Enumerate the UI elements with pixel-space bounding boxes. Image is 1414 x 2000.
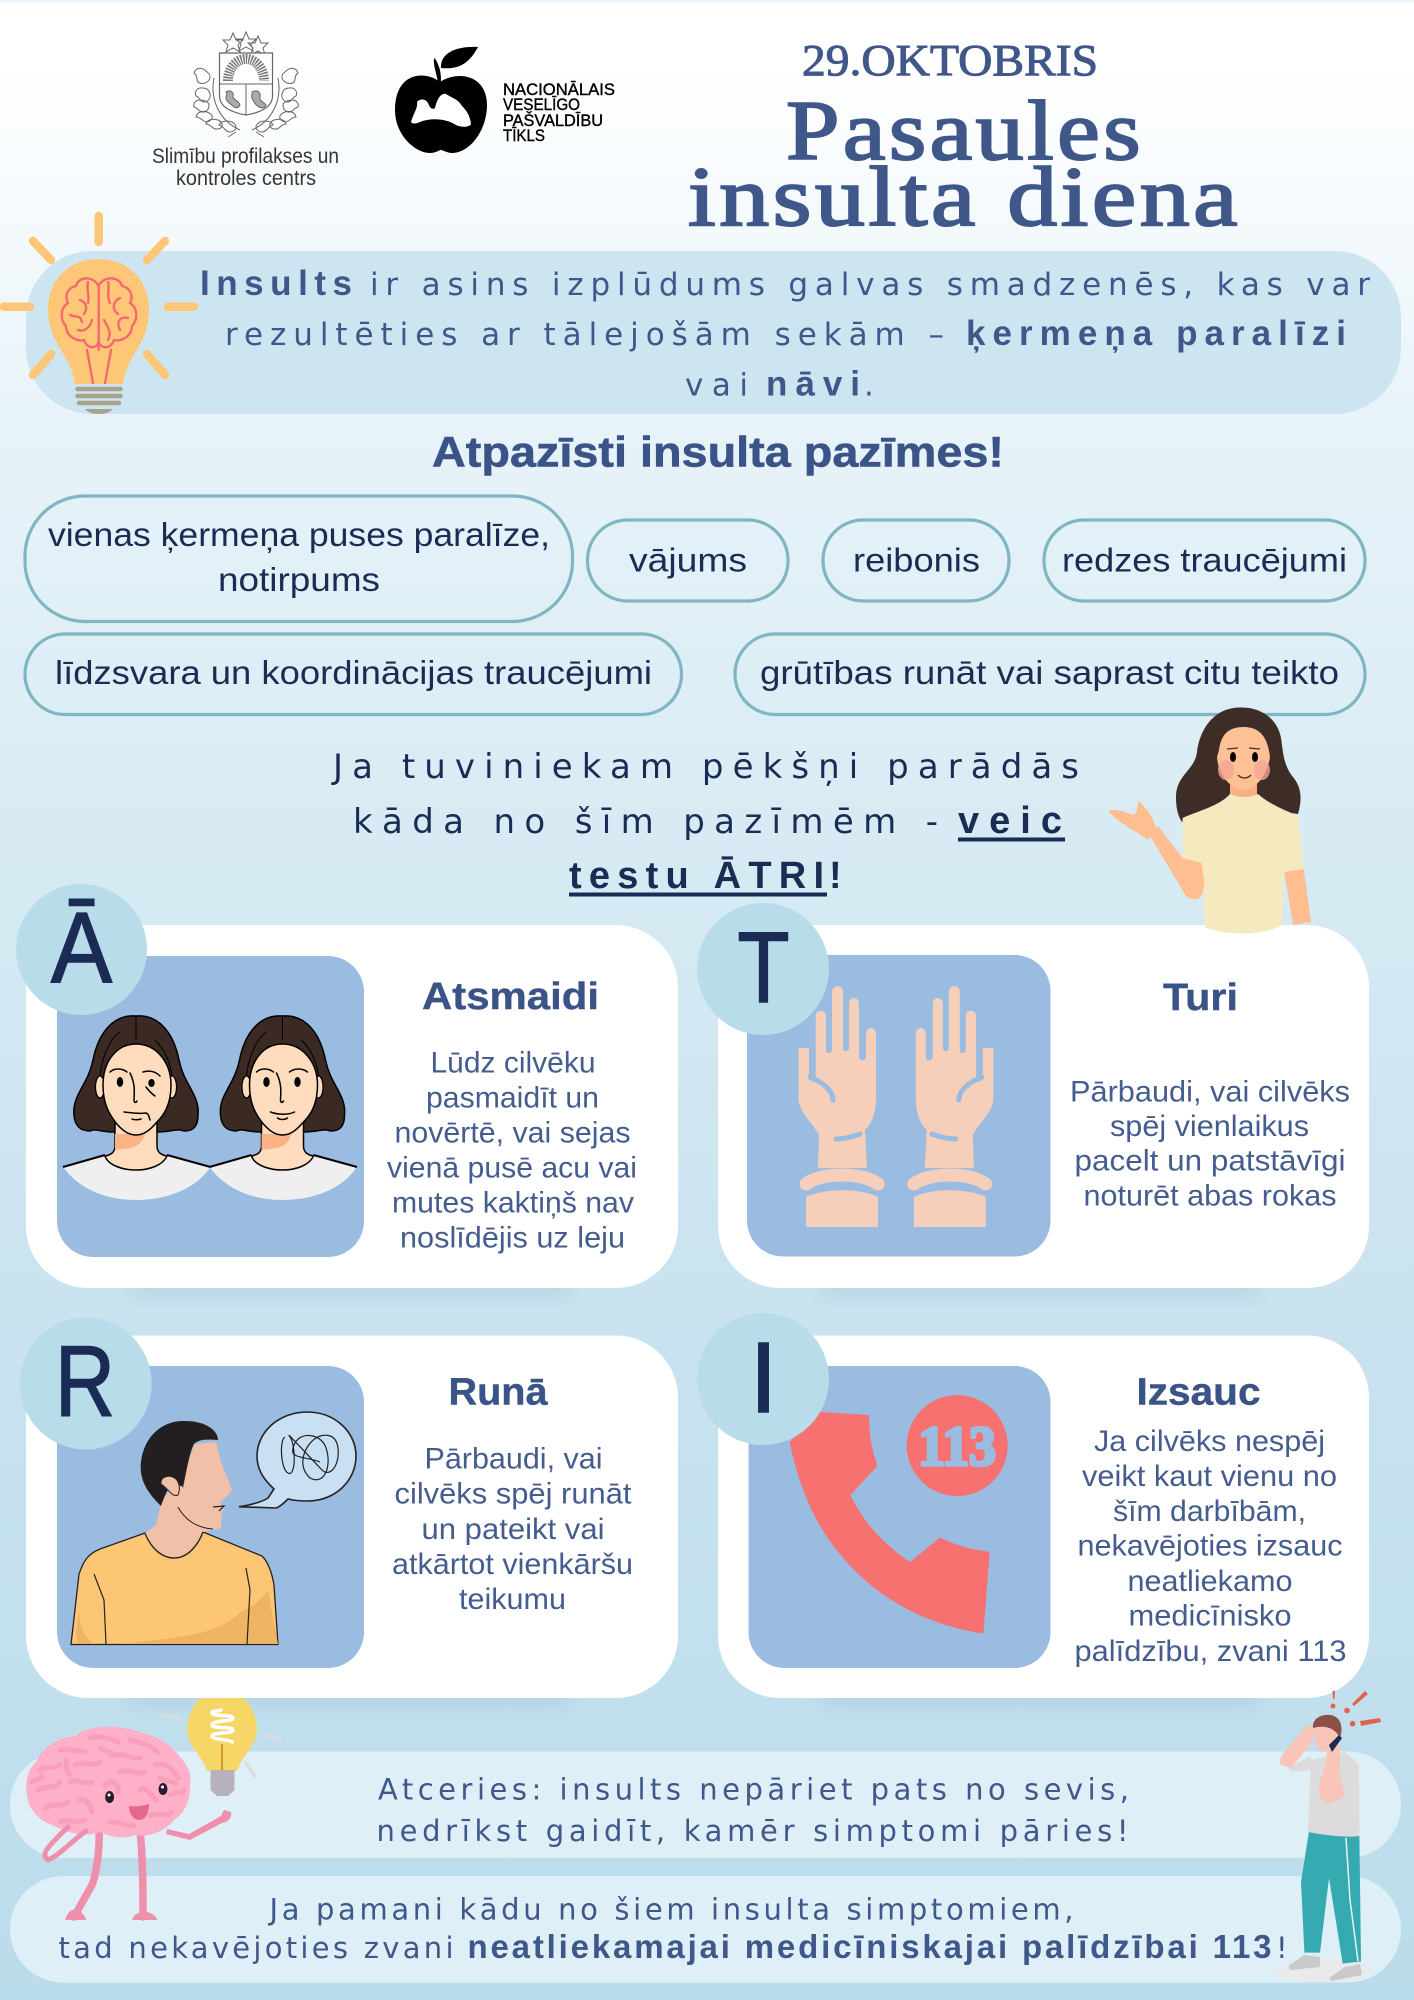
description: palīdzību, zvani 113: [1074, 1635, 1346, 1668]
description: spēj vienlaikus: [1110, 1110, 1309, 1143]
callout text: kāda no šīm pazīmēm -: [353, 802, 938, 842]
definition text: vai: [685, 368, 748, 404]
icon: 113 badge: 113: [918, 1416, 996, 1478]
description: cilvēks spēj runāt: [394, 1478, 632, 1510]
description: Lūdz cilvēku: [430, 1046, 596, 1080]
symptom pill: dizziness: reibonis: [853, 542, 980, 578]
logo text: network: VESELĪGO: [503, 95, 580, 114]
symptom pill: weakness: [588, 520, 788, 601]
definition text: [200, 264, 1370, 404]
letter badge R: [20, 1318, 152, 1450]
callout text: !: [829, 855, 842, 897]
panel: call to action: Ja pamani kādu no šiem insulta simptomiem,: [268, 1892, 1074, 1926]
panel: I call: [697, 1313, 1369, 1698]
icon: light bulb over brain: [163, 1690, 280, 1796]
panel: T hold: [697, 903, 1369, 1288]
description: [1070, 1076, 1350, 1212]
heading Runā: Runā: [448, 1372, 548, 1414]
panel: call to action: !: [1276, 1931, 1288, 1965]
panel: definition: [26, 251, 1401, 414]
description: noslīdējis uz leju: [400, 1222, 625, 1254]
symptom pill: vision: [1044, 520, 1365, 601]
panel: remember: [10, 1752, 1401, 1858]
icon: light bulb with brain: [4, 216, 194, 414]
definition text: nāvi: [766, 364, 860, 404]
description: nekavējoties izsauc: [1078, 1530, 1342, 1562]
definition text: Insults: [200, 264, 352, 303]
symptom pill: paralysis: notirpums: [218, 561, 380, 598]
description: noturēt abas rokas: [1084, 1180, 1336, 1212]
symptom pill: balance: [25, 634, 682, 714]
symptom pill: weakness: vājums: [629, 542, 747, 578]
symptom pill: speech: [735, 634, 1365, 714]
description: un pateikt vai: [422, 1513, 604, 1546]
callout text: [331, 747, 1079, 897]
illustration: speech bubble: [239, 1412, 356, 1508]
title: [688, 84, 1241, 244]
icon: woman presenting: [1108, 707, 1311, 934]
logo text: network: [503, 80, 615, 145]
logo text: SPKC: Slimību profilakses un: [152, 145, 339, 168]
symptom pill: speech: grūtības runāt vai saprast citu teikto: [760, 654, 1339, 691]
description: pasmaidīt un: [426, 1082, 599, 1114]
icon: brain character: [26, 1727, 231, 1920]
description: [387, 1046, 637, 1254]
symptom pill: vision: redzes traucējumi: [1062, 542, 1347, 578]
description: [1074, 1425, 1346, 1668]
symptom pill: balance: līdzsvara un koordinācijas traucējumi: [55, 654, 652, 691]
description: atkārtot vienkāršu: [392, 1548, 633, 1581]
heading Turi: Turi: [1163, 977, 1238, 1019]
callout text: testu ĀTRI: [569, 855, 824, 897]
panel: call to action: tad nekavējoties zvani: [58, 1931, 454, 1965]
symptom pill: paralysis: [25, 496, 572, 622]
logo: apple: [395, 47, 487, 153]
description: mutes kaktiņš nav: [392, 1186, 634, 1220]
panel: R speak: [20, 1318, 678, 1698]
description: novērtē, vai sejas: [394, 1116, 630, 1150]
icon: worried man on phone: [1273, 1691, 1381, 1982]
letter badge I: [697, 1313, 829, 1445]
definition text: ir asins izplūdums galvas smadzenēs, kas var: [370, 267, 1370, 303]
definition text: rezultēties ar tālejošām sekām –: [225, 317, 944, 353]
logo text: network: NACIONĀLAIS: [503, 80, 615, 99]
letter badge R: R: [55, 1326, 115, 1438]
description: Pārbaudi, vai cilvēks: [1070, 1076, 1350, 1108]
title: Pasaules: [786, 84, 1144, 178]
heading Atsmaidi: Atsmaidi: [422, 976, 599, 1018]
letter badge Ā: [16, 884, 147, 1015]
description: veikt kaut vienu no: [1082, 1460, 1337, 1493]
panel: remember: Atceries: insults nepāriet pats no sevis,: [378, 1772, 1129, 1806]
description: medicīnisko: [1128, 1600, 1292, 1632]
panel: remember: nedrīkst gaidīt, kamēr simptomi pāries!: [376, 1814, 1128, 1848]
symptom pill: dizziness: [823, 520, 1009, 601]
letter badge T: [697, 903, 829, 1035]
panel: Ā smile: [16, 884, 678, 1288]
symptom pill: paralysis: vienas ķermeņa puses paralīze,: [48, 516, 550, 553]
illustration: face drooping: [63, 1016, 210, 1200]
definition text: ķermeņa paralīzi: [966, 314, 1346, 353]
panel: call to action: [10, 1876, 1401, 1982]
callout text: veic: [958, 800, 1062, 842]
illustration: man speaking: [71, 1421, 278, 1644]
title: insulta diena: [688, 150, 1241, 244]
letter badge Ā: Ā: [51, 892, 112, 1004]
card shadows: [130, 1278, 1260, 1706]
heading Izsauc: Izsauc: [1136, 1372, 1260, 1414]
logo: coat of arms: [194, 32, 298, 137]
description: Pārbaudi, vai: [424, 1442, 602, 1476]
description: neatliekamo: [1128, 1565, 1292, 1598]
description: šīm darbībām,: [1113, 1495, 1306, 1528]
definition text: .: [864, 368, 874, 404]
description: [392, 1442, 633, 1616]
letter badge T: T: [738, 912, 790, 1024]
logo text: network: PAŠVALDĪBU: [503, 111, 603, 130]
illustration: left hand: [798, 986, 878, 1227]
panel: call to action: neatliekamajai medicīniskajai palīdzībai 113: [468, 1928, 1272, 1965]
illustration: face normal: [210, 1016, 357, 1200]
logo text: SPKC: [152, 145, 339, 190]
description: pacelt un patstāvīgi: [1074, 1144, 1346, 1178]
description: vienā pusē acu vai: [387, 1152, 637, 1184]
icon: 113 badge: [907, 1395, 1008, 1496]
logo text: network: TĪKLS: [503, 126, 545, 145]
logo text: SPKC: kontroles centrs: [176, 167, 316, 190]
date heading: 29.OKTOBRIS: [802, 36, 1098, 85]
illustration: right hand: [914, 986, 993, 1227]
description: teikumu: [459, 1583, 566, 1616]
icon: phone: [790, 1412, 990, 1634]
description: Ja cilvēks nespēj: [1094, 1425, 1325, 1458]
heading: recognise signs: Atpazīsti insulta pazīmes!: [432, 428, 1004, 476]
callout text: Ja tuviniekam pēkšņi parādās: [331, 747, 1079, 787]
letter badge I: I: [750, 1322, 777, 1434]
